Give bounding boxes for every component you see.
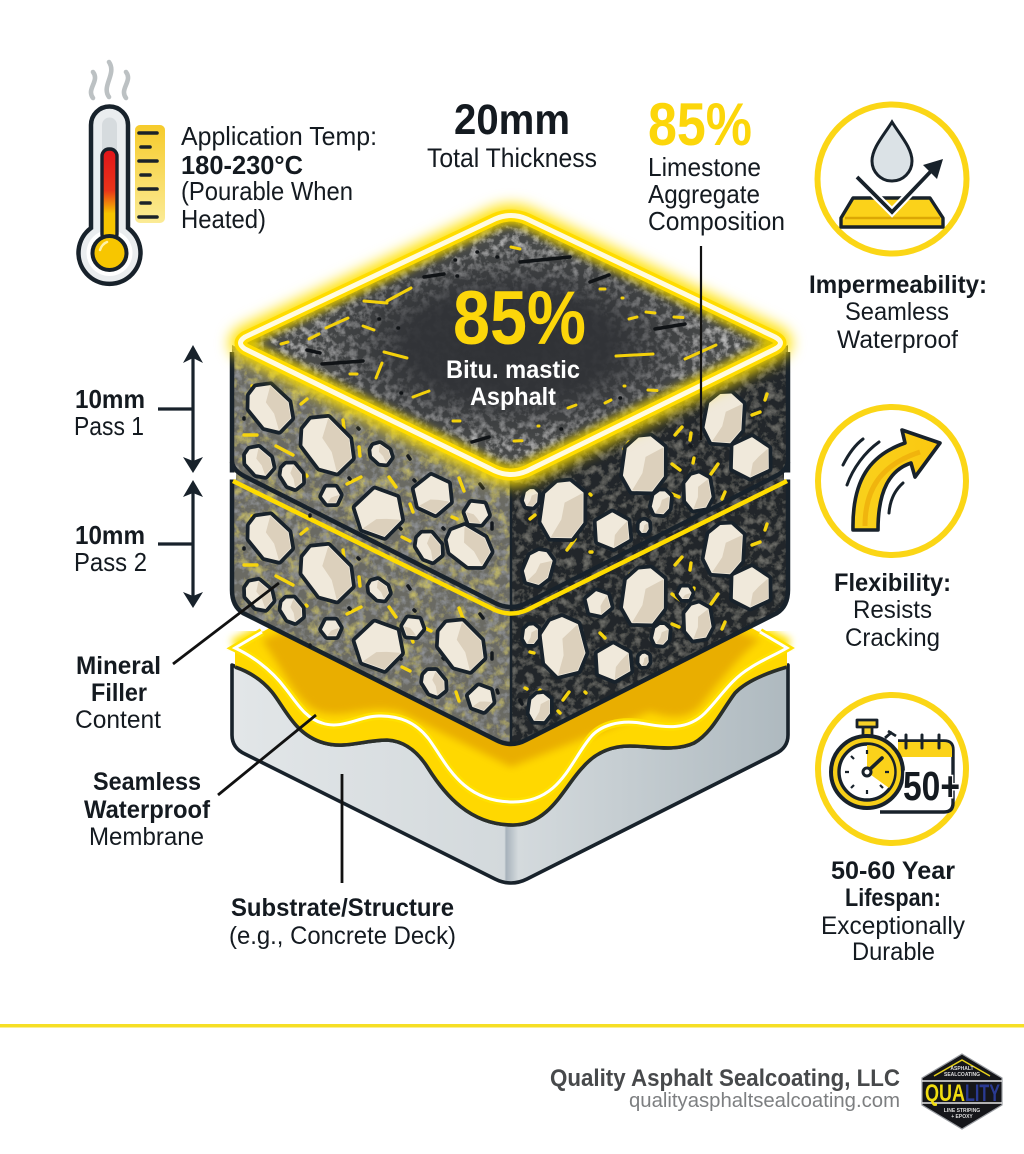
footer: company logo: LINE STRIPING <box>944 1108 980 1114</box>
rocks: upper pass right face <box>517 387 775 589</box>
text: flexibility: Resists <box>853 596 932 624</box>
text: bituminous mastic asphalt on top face <box>446 276 586 411</box>
block: top face <box>240 216 780 474</box>
footer: company name <box>550 1065 900 1112</box>
membrane: seamless yellow waterproof layer <box>235 540 787 825</box>
text: flexibility: Cracking <box>845 624 940 652</box>
footer: company logo: + EPOXY <box>951 1114 973 1120</box>
text: application temperature <box>181 121 377 234</box>
text: lifespan: Exceptionally <box>821 912 965 940</box>
text: bituminous mastic asphalt on top face: Asphalt <box>470 383 557 411</box>
flecks: dark inclusions <box>244 418 691 704</box>
text: limestone aggregate composition: Limestone <box>648 152 761 182</box>
text: seamless waterproof membrane: Seamless <box>93 768 201 796</box>
text: mineral filler content: Filler <box>91 679 147 707</box>
text: 10mm pass 1 <box>74 384 145 441</box>
text: mineral filler content <box>75 652 161 734</box>
text: 10mm pass 2 <box>74 520 147 577</box>
text: 10mm pass 1: Pass 1 <box>74 411 144 441</box>
text: mineral filler content: Mineral <box>76 652 161 680</box>
text: impermeability <box>809 271 987 354</box>
text: application temperature: Heated) <box>181 204 266 234</box>
footer: company logo: ASPHALT <box>950 1066 974 1072</box>
text: bituminous mastic asphalt on top face: 85% <box>453 276 586 361</box>
text: seamless waterproof membrane <box>84 768 211 851</box>
dimension arrow: pass 2 <box>158 480 203 608</box>
text: total thickness: Total Thickness <box>427 143 597 173</box>
block: right face <box>511 345 788 746</box>
text: impermeability: Waterproof <box>837 326 958 354</box>
text: impermeability: Impermeability: <box>809 271 987 299</box>
text: application temperature: 180-230°C <box>181 150 303 180</box>
icon: thermometer with heat scale <box>78 62 165 284</box>
text: 10mm pass 1: 10mm <box>75 384 145 414</box>
rocks: lower pass right face <box>521 518 775 725</box>
text: mineral filler content: Content <box>75 706 161 734</box>
text: limestone aggregate composition: 85% <box>648 91 752 158</box>
text: seamless waterproof membrane: Membrane <box>89 823 204 851</box>
text: bituminous mastic asphalt on top face: Bitu. mastic <box>446 356 580 384</box>
flecks: yellow mineral filler <box>244 386 767 713</box>
text: substrate <box>229 894 456 950</box>
text: lifespan: 50-60 Year <box>831 857 955 885</box>
text: lifespan: Durable <box>852 938 935 966</box>
icon: impermeability <box>818 104 966 254</box>
text: 10mm pass 2: 10mm <box>75 520 145 550</box>
text: flexibility: Flexibility: <box>834 569 951 597</box>
text: limestone aggregate composition <box>648 91 785 236</box>
text: limestone aggregate composition: Aggregate <box>648 179 760 209</box>
footer: company logo: QUA <box>925 1080 965 1107</box>
block: left face <box>232 345 511 746</box>
text: application temperature: (Pourable When <box>181 176 353 206</box>
icon: flexibility <box>818 407 966 555</box>
footer: company name: qualityasphaltsealcoating.com <box>629 1090 900 1112</box>
rocks: upper pass left face <box>242 379 496 575</box>
leader line: mineral filler <box>173 583 279 664</box>
footer divider <box>0 1024 1024 1028</box>
text: substrate: Substrate/Structure <box>231 894 454 922</box>
text: lifespan: Lifespan: <box>845 884 941 912</box>
footer: company name: Quality Asphalt Sealcoating, LLC <box>550 1065 900 1092</box>
rocks: lower pass left face <box>242 509 495 712</box>
text: limestone aggregate composition: Composition <box>648 206 785 236</box>
leader line: membrane <box>218 715 316 795</box>
dimension arrow: pass 1 <box>158 345 203 473</box>
footer: company logo: LITY <box>965 1080 1000 1107</box>
text: seamless waterproof membrane: Waterproof <box>84 796 211 824</box>
block: outline and seam between passes <box>229 352 791 745</box>
text: impermeability: Seamless <box>845 298 949 326</box>
substrate: concrete deck <box>232 665 788 883</box>
icon: stopwatch and calendar 50+ <box>818 695 966 843</box>
icon: stopwatch and calendar 50+: 50+ <box>903 763 960 809</box>
text: total thickness: 20mm <box>454 96 570 144</box>
text: application temperature: Application Temp: <box>181 121 377 151</box>
text: substrate: (e.g., Concrete Deck) <box>229 922 456 950</box>
leader line: limestone aggregate <box>700 246 702 440</box>
leader line: substrate <box>341 774 343 883</box>
text: 10mm pass 2: Pass 2 <box>74 547 147 577</box>
footer: company logo <box>922 1054 1002 1129</box>
text: lifespan <box>821 857 965 966</box>
footer: company logo: SEALCOATING <box>944 1072 980 1078</box>
text: flexibility <box>834 569 951 652</box>
text: total thickness <box>427 96 597 173</box>
